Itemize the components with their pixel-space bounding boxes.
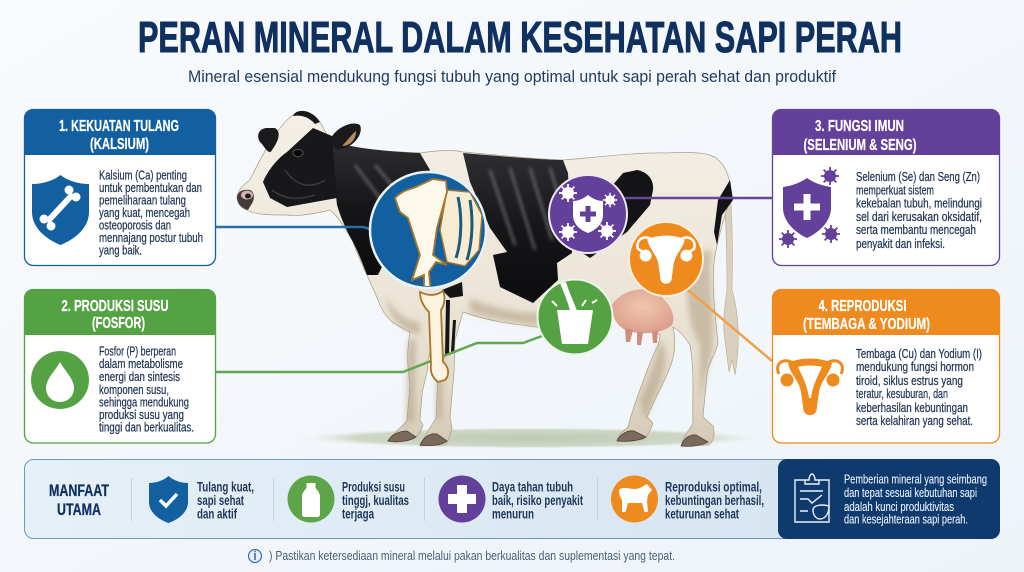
teats: [625, 328, 658, 345]
circle: milk: [538, 280, 612, 354]
panel text: osteoporosis dan: [99, 218, 171, 232]
panel text: Tembaga (Cu) dan Yodium (I): [856, 346, 982, 361]
right ear: [330, 123, 361, 149]
benefit: tulang: Tulang kuat,: [197, 480, 254, 494]
panel: kekuatan tulang: [24, 109, 216, 266]
panel heading: [803, 298, 930, 333]
panel text: tinggi dan berkualitas.: [99, 420, 194, 434]
callout text: dan kesejahteraan sapi perah.: [844, 512, 968, 526]
panel heading: 3. FUNGSI IMUN: [815, 118, 904, 135]
panel: fungsi imun: [772, 109, 1000, 266]
panel heading: [59, 118, 179, 153]
panel text: memperkuat sistem: [856, 182, 934, 198]
icon: shield with viruses: [779, 167, 840, 248]
panel text: [856, 169, 982, 251]
panel text: Kalsium (Ca) penting: [99, 168, 187, 182]
panel text: teratur, kesuburan, dan: [856, 386, 948, 401]
leg black marks: [445, 300, 456, 355]
panel text: yang kuat, mencegah: [99, 205, 190, 220]
icon: health cross: [438, 476, 486, 522]
panel text: komponen susu,: [99, 382, 169, 397]
panel header: [24, 109, 216, 155]
left ear: [258, 128, 279, 152]
panel text: serta kelahiran yang sehat.: [856, 413, 973, 428]
panel text: untuk pembentukan dan: [99, 180, 202, 195]
connector: calcium line: [216, 227, 370, 229]
callout: kesimpulan: [778, 459, 1000, 539]
body shading: [385, 250, 713, 425]
panel text: kekebalan tubuh, melindungi: [856, 196, 982, 210]
benefit: susu: terjaga: [342, 506, 374, 522]
panel heading: 4. REPRODUKSI: [818, 298, 906, 315]
panel text: serta membantu mencegah: [856, 222, 976, 237]
panel header: [772, 109, 1000, 155]
benefit: imun: Daya tahan tubuh: [492, 480, 573, 494]
head black patch: [263, 128, 337, 207]
panel text: Selenium (Se) dan Seng (Zn): [856, 169, 980, 184]
panel heading: [62, 298, 168, 332]
barrel black patch: [463, 153, 572, 303]
heading: manfaat utama: MANFAAT: [49, 481, 109, 500]
panel heading: [804, 118, 916, 154]
panel text: pemeliharaan tulang: [99, 192, 186, 208]
panel text: sel dari kerusakan oksidatif,: [856, 209, 982, 224]
panel text: Fosfor (P) berperan: [99, 344, 176, 358]
muzzle: [237, 190, 254, 210]
panel text: tiroid, siklus estrus yang: [856, 373, 963, 388]
benefit: reproduksi: keturunan sehat: [665, 506, 739, 522]
benefit: reproduksi: Reproduksi optimal,: [665, 480, 762, 494]
circle: bones: [370, 172, 486, 296]
panel heading: 1. KEKUATAN TULANG: [59, 118, 179, 135]
benefit: reproduksi: [665, 480, 764, 522]
panel text: keberhasilan kebuntingan: [856, 400, 968, 415]
head folds: [272, 170, 325, 198]
panel text: sehingga mendukung: [99, 394, 189, 410]
benefit: imun: menurun: [492, 506, 534, 522]
benefit: tulang: [197, 480, 254, 522]
cow illustration: [237, 111, 765, 449]
hooves: [388, 431, 708, 446]
rump black patch: [575, 170, 653, 258]
connector: immune line: [623, 197, 772, 199]
connector: reproduction line: [688, 290, 772, 361]
panel heading: (SELENIUM & SENG): [804, 137, 916, 154]
panel heading: (TEMBAGA & YODIUM): [803, 316, 930, 333]
leg bone: [420, 291, 448, 382]
panel text: [99, 168, 203, 258]
subtitle: Mineral esensial mendukung fungsi tubuh yang optimal untuk sapi perah sehat dan produktif: [188, 67, 836, 86]
panel text: mennajang postur tubuh: [99, 230, 203, 245]
icon: calf: [611, 476, 658, 522]
eye: [293, 150, 303, 156]
icon: milk drop: [31, 351, 89, 409]
panel text: energi dan sintesis: [99, 369, 180, 384]
panel heading: (FOSFOR): [92, 315, 145, 332]
udder: [612, 289, 673, 333]
ground shadow: [295, 427, 765, 449]
panel heading: (KALSIUM): [90, 136, 149, 153]
benefit: tulang: dan aktif: [197, 506, 237, 522]
callout text: [844, 472, 987, 526]
icon: clipboard: [795, 474, 829, 522]
benefit: susu: [342, 480, 409, 522]
icon: info: [248, 550, 262, 562]
scapula and spine: [395, 179, 447, 296]
ribs: [440, 190, 482, 266]
panel text: dalam metabolisme: [99, 356, 183, 371]
benefit: tulang: sapi sehat: [197, 493, 244, 508]
benefit: imun: baik, risiko penyakit: [492, 493, 583, 508]
callout text: adalah kunci produktivitas: [844, 499, 954, 514]
panel header: [772, 289, 1000, 335]
panel: manfaat utama: [24, 460, 794, 538]
rear black strip: [714, 180, 733, 245]
benefit: susu: tinggj, kualitas: [342, 493, 409, 508]
icon: milk bottle: [288, 476, 334, 522]
panel header: [24, 289, 216, 335]
tail: [722, 172, 738, 375]
poll tuft: [293, 111, 320, 124]
footer note: ) Pastikan ketersediaan mineral melalui pakan berkualitas dan suplementasi yang tepat.: [269, 548, 675, 563]
benefit: susu: Produksi susu: [342, 480, 405, 494]
icon: uterus: [778, 358, 842, 415]
circle: reproduction: [629, 222, 703, 296]
hair highlights: [355, 165, 566, 250]
elbow black patch: [442, 282, 463, 298]
panel text: [856, 346, 982, 428]
cow body: [237, 113, 731, 446]
panel text: [99, 344, 194, 434]
panel text: produksi susu yang: [99, 407, 184, 422]
circle: immune: [549, 175, 627, 253]
heading: manfaat utama: [49, 481, 109, 519]
panel: produksi susu: [24, 289, 216, 443]
panel heading: 2. PRODUKSI SUSU: [62, 298, 168, 315]
benefit: imun: [492, 480, 583, 522]
icon: check shield: [149, 476, 188, 523]
heading: manfaat utama: UTAMA: [57, 500, 101, 519]
connector: phosphorus line: [216, 336, 542, 372]
panel: reproduksi: [772, 289, 1000, 443]
benefit: reproduksi: kebuntingan berhasil,: [665, 493, 764, 508]
icon: shield with bone: [32, 175, 89, 245]
panel text: yang baik.: [99, 242, 142, 258]
panel text: penyakit dan infeksi.: [856, 236, 945, 251]
panel text: mendukung fungsi hormon: [856, 359, 974, 374]
neck black patch: [330, 140, 430, 275]
